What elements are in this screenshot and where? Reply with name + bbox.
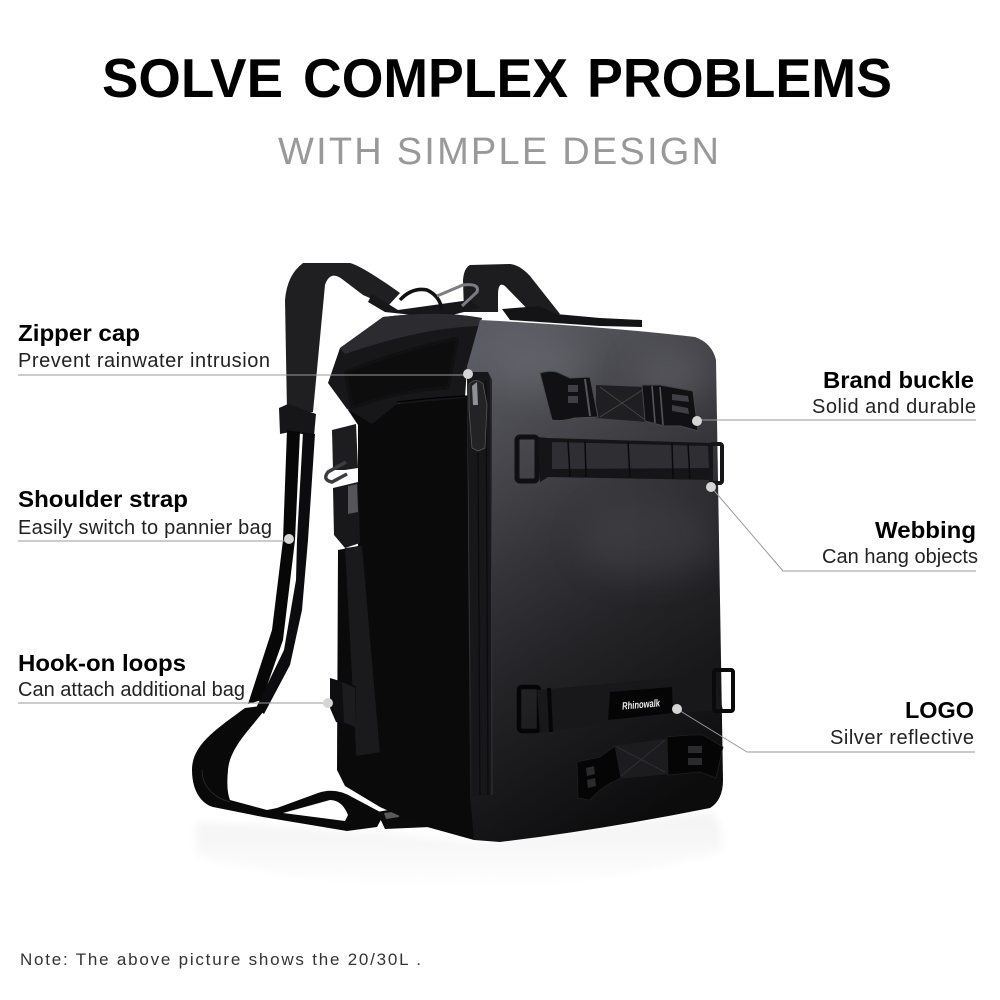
upper webbing strap [517,437,722,483]
side strap and buckles [326,424,381,768]
floor reflection [196,812,722,888]
callout: webbing: Webbing [875,517,976,543]
lower webbing strap with logo [519,670,733,733]
product image: backpack [192,263,733,888]
callout: hook-on loops: Can attach additional bag [18,679,245,701]
callout: logo: Silver reflective [830,727,974,749]
roll-top collar [328,314,482,424]
callout: shoulder strap: Shoulder strap [18,486,188,512]
left shoulder strap [192,263,430,831]
top hardware and carabiner [368,285,642,327]
callout: webbing [706,482,978,571]
callout: zipper cap: Prevent rainwater intrusion [18,350,270,372]
left buckle end [577,746,621,800]
right buckle [642,385,698,431]
logo tag [608,687,673,720]
title: PROBLEMS [587,47,892,109]
zipper track and zipper pull [467,372,492,796]
right carry strap [463,264,560,322]
side panel [337,395,474,840]
left buckle [540,371,598,421]
callout: zipper cap: Zipper cap [18,320,140,346]
callout: webbing: Can hang objects [822,546,978,568]
title: COMPLEX [303,47,568,109]
subtitle: WITH SIMPLE DESIGN [278,131,719,173]
callout: brand buckle: Brand buckle [823,367,974,393]
strap opening [283,800,348,821]
title: SOLVE [102,47,283,109]
footnote: Note: The above picture shows the 20/30L . [20,950,421,969]
callout: zipper cap [18,320,473,379]
title [102,47,892,109]
brand buckle webbing [540,371,698,431]
callout: brand buckle: Solid and durable [812,396,976,418]
callout: brand buckle [692,367,976,426]
front panel [467,320,723,842]
lower webbing strap with logo: Rhinowalk [622,697,661,713]
webbing band [596,385,647,422]
lower buckle [577,735,723,800]
bottom strap hardware [377,808,430,829]
right buckle end [667,735,723,778]
callout: shoulder strap: Easily switch to pannier bag [18,517,272,539]
callout: hook-on loops: Hook-on loops [18,650,186,676]
webbing band [613,738,669,779]
callout: hook-on loops [18,650,333,708]
callout: logo [672,697,975,752]
callout: logo: LOGO [905,697,974,723]
callout: shoulder strap [18,486,294,544]
